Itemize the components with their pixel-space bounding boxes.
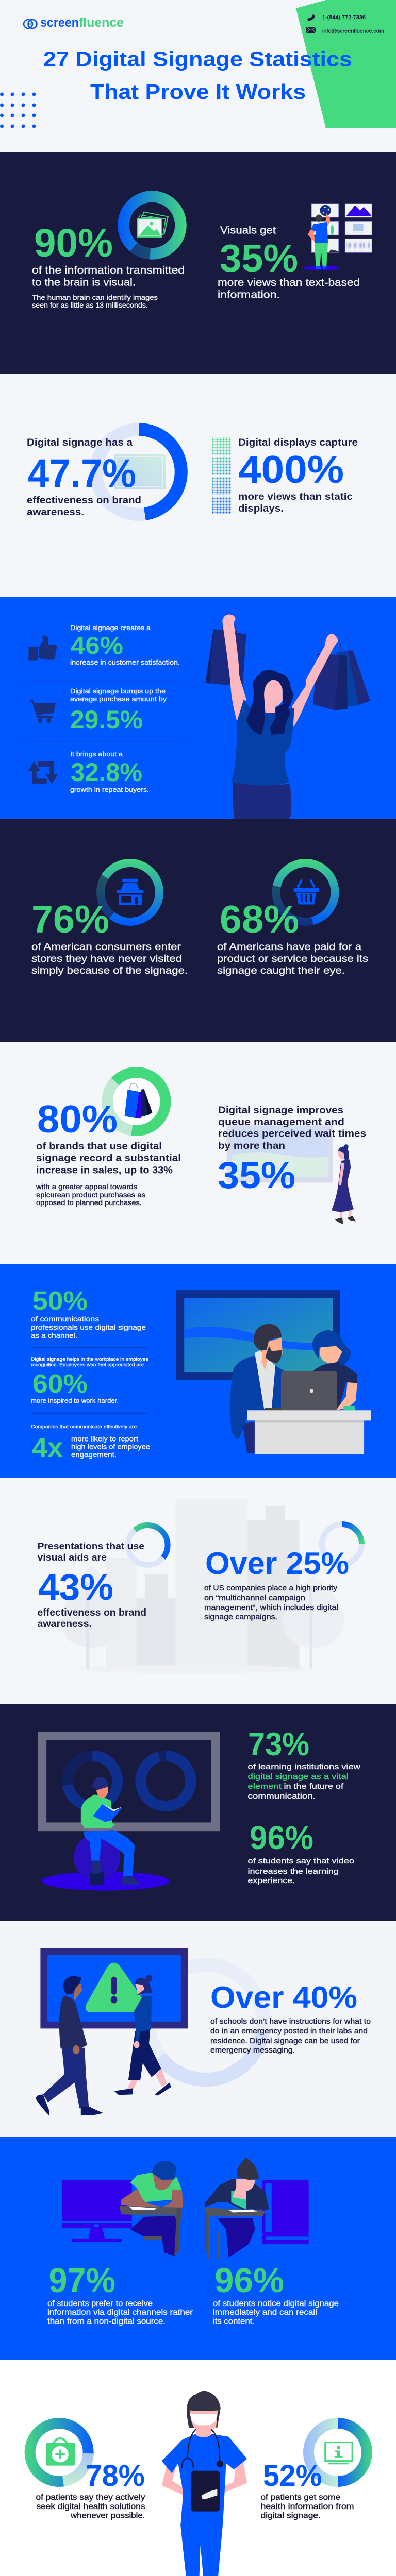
stat: 52%: of patients get some	[261, 2493, 340, 2502]
stat: 96% recall: 96%	[214, 2261, 284, 2300]
stat: over 40%: residence. Digital signage can be used for	[210, 2037, 360, 2045]
stat: 43%: 43%	[38, 1567, 113, 1608]
title: That Prove It Works	[90, 80, 306, 104]
stat: 97%: information via digital channels rather	[47, 2308, 193, 2317]
stat: 60%: more inspired to work harder.	[31, 1397, 119, 1404]
stat: 97%: 97%	[48, 2261, 116, 2300]
icon: info screen	[325, 2443, 352, 2464]
stat: 4x: high levels of employee	[71, 1443, 150, 1451]
stat: 50%: 50%	[32, 1286, 88, 1315]
stat: 73%: of learning institutions view	[248, 1762, 360, 1771]
logo: screen	[40, 15, 79, 30]
donut chart: left	[68, 1756, 118, 1806]
stat: queue 35%	[218, 1105, 366, 1196]
stat: 4x: more likely to report	[71, 1435, 138, 1443]
stat: 4x	[31, 1424, 150, 1463]
stat: over 40%: do in an emergency posted in their labs and	[210, 2027, 368, 2036]
title: 27 Digital Signage Statistics	[43, 47, 352, 71]
stat: 80%: increase in sales, up to 33%	[36, 1165, 173, 1176]
icon: phone	[307, 14, 315, 21]
panel: presentations and campaigns	[0, 1478, 396, 1704]
stat: queue 35%: queue management and	[218, 1117, 344, 1128]
donut chart: 40%	[148, 1965, 263, 2079]
stat: 60%: 60%	[32, 1369, 88, 1398]
stat: 43%: visual aids are	[37, 1552, 107, 1563]
illustration: students at desks	[62, 2158, 309, 2259]
illustration: person viewing screens	[303, 204, 372, 270]
stat: 60%	[31, 1357, 148, 1404]
stat: 400%: Digital displays capture	[238, 437, 358, 448]
email: info@screenfluence.com	[322, 28, 384, 34]
donut chart: 52%	[308, 2424, 367, 2481]
stat: 68%: 68%	[220, 897, 299, 941]
stat: 96% recall	[213, 2261, 339, 2326]
stat: over 40%: Over 40%	[210, 1980, 357, 2014]
icon: mail	[306, 27, 316, 33]
stat: 29.5%: Digital signage bumps up the	[70, 687, 166, 695]
panel: shopping	[0, 597, 396, 819]
stat: 52%: health information from	[261, 2502, 354, 2511]
stat: 32.8%: It brings about a	[70, 750, 123, 758]
stat: 35%: 35%	[220, 236, 298, 280]
icon: cart	[30, 700, 56, 723]
stat: 52%: 52%	[263, 2459, 322, 2493]
stat: 80%: of brands that use digital	[36, 1141, 162, 1152]
icon: photos	[138, 212, 168, 237]
stat: 80%	[36, 1097, 181, 1207]
icon: medical bag	[46, 2438, 75, 2466]
panel: emergency	[0, 1921, 396, 2137]
stat: 90%: seen for as little as 13 milliseconds.	[32, 301, 148, 309]
illustration: standing woman	[332, 1144, 356, 1224]
stat: 80%: 80%	[37, 1097, 118, 1141]
donut chart: 76%	[101, 863, 159, 922]
illustration: city backdrop	[62, 1499, 344, 1673]
stat: 76%	[31, 897, 188, 976]
stat: 97%: of students prefer to receive	[47, 2299, 153, 2308]
stat: 73%: element	[248, 1782, 282, 1791]
stat: 90%	[32, 221, 185, 309]
stat: 46%: 46%	[71, 632, 123, 659]
panel: visuals	[0, 152, 396, 374]
stat: 50%: professionals use digital signage	[31, 1323, 146, 1331]
stat: 73%: 73%	[248, 1726, 309, 1762]
stat: 46%	[70, 624, 180, 666]
stat: 76%: simply because of the signage.	[31, 965, 188, 976]
panel: workplace	[0, 1264, 396, 1478]
stat: 96% recall: of students notice digital signage	[213, 2299, 339, 2308]
stat: 4x: Companies that communicate effectively are	[31, 1424, 137, 1430]
stat: 47.7%: 47.7%	[28, 450, 136, 496]
panel: brand awareness and views	[27, 423, 358, 521]
stat: 97%: than from a non-digital source.	[47, 2317, 166, 2326]
donut chart: 78%	[30, 2424, 88, 2481]
stat: 68%: product or service because its	[217, 954, 368, 964]
stat: 400%	[238, 437, 358, 514]
donut chart: 68%	[276, 863, 335, 922]
illustration: woman with shopping bags	[205, 614, 370, 819]
stat: 68%	[217, 897, 368, 976]
stat: 400%: more views than static	[238, 492, 353, 502]
donut chart: right	[141, 1756, 191, 1806]
stat: 43%	[37, 1540, 146, 1630]
stat: 90%: of the information transmitted	[32, 265, 185, 276]
stat: 35%: information.	[218, 290, 280, 301]
stat: 400%: displays.	[238, 503, 284, 514]
icon: thumbs up	[28, 635, 57, 661]
illustration: frame	[38, 1732, 220, 1831]
illustration: nurse	[162, 2391, 247, 2576]
donut chart: 47.7%	[96, 430, 182, 514]
stat: 96% video: increases the learning	[248, 1867, 339, 1876]
stat: over 25%: Over 25%	[205, 1546, 349, 1581]
stat: 32.8%: growth in repeat buyers.	[70, 786, 149, 793]
stat: 47.7%	[27, 437, 141, 518]
stat: 60%: recognition. Employees who feel appreciated are	[31, 1362, 144, 1368]
phone number: 1-(844) 772-7336	[322, 14, 366, 21]
donut chart: 25%	[322, 1524, 362, 1564]
stat: 96% recall: immediately and can recall	[213, 2308, 317, 2317]
stat: 47.7%: effectiveness on brand	[27, 495, 141, 506]
illustration: two colleagues at a laptop	[176, 1290, 371, 1454]
stat: 68%: signage caught their eye.	[217, 965, 345, 976]
stat: 50%: as a channel.	[31, 1331, 77, 1340]
panel: students	[0, 2137, 396, 2360]
stat: 90%: to the brain is visual.	[32, 277, 136, 289]
stat: 400%: 400%	[238, 448, 344, 491]
stat: 35%: Visuals get	[220, 225, 276, 236]
stat: 73%	[248, 1726, 360, 1801]
stat: over 25%: of US companies place a high priority	[204, 1584, 338, 1592]
stat: 78%: whenever possible.	[70, 2511, 145, 2520]
stat: over 25%	[204, 1546, 349, 1621]
stat: 4x: 4x	[32, 1432, 63, 1463]
stat: 29.5%: 29.5%	[70, 705, 143, 734]
stat: 52%	[261, 2459, 354, 2520]
panel: consumers	[0, 819, 396, 1042]
stat: 80%: with a greater appeal towards	[36, 1183, 137, 1191]
stat: 50%: of communications	[31, 1315, 99, 1323]
stat: 47.7%: Digital signage has a	[27, 437, 133, 448]
stat: 80%: signage record a substantial	[36, 1153, 181, 1164]
stat: queue 35%: 35%	[218, 1155, 295, 1196]
stat: 96% video	[248, 1819, 354, 1885]
stat: 97%	[47, 2261, 193, 2326]
stat: 29.5%: average purchase amount by	[70, 695, 167, 703]
stat: 43%: effectiveness on brand	[37, 1607, 146, 1618]
stat: 29.5%	[70, 687, 167, 734]
stat: 76%: of American consumers enter	[31, 942, 182, 953]
stat: 96% video: 96%	[250, 1819, 314, 1856]
stat: over 25%: on “multichannel campaign	[204, 1594, 305, 1602]
stat: 80%: opposed to planned purchases.	[36, 1199, 142, 1207]
stat: 73%: communication.	[248, 1792, 316, 1801]
stat: 90%: 90%	[34, 221, 113, 265]
stat: 68%: of Americans have paid for a	[217, 942, 361, 953]
stat: 76%: stores they have never visited	[31, 954, 182, 964]
illustration: student reading	[41, 1777, 169, 1891]
stat: 78%: seek digital health solutions	[36, 2502, 145, 2511]
stat: 90%: The human brain can identify images	[32, 293, 158, 301]
icon: store	[117, 879, 143, 905]
donut chart: 80%	[107, 1073, 166, 1130]
green corner shape	[296, 0, 396, 128]
stat: 46%: Digital signage creates a	[70, 624, 151, 632]
stat: over 40%: emergency messaging.	[210, 2046, 295, 2055]
panel: brands and queues	[0, 1042, 396, 1264]
icon: basket	[293, 879, 319, 905]
stat: 35%: more views than text-based	[218, 277, 360, 289]
dot grid	[0, 93, 36, 128]
stat: 32.8%: 32.8%	[71, 758, 142, 787]
stat: 4x: engagement.	[71, 1451, 117, 1459]
stat: 43%: Presentations that use	[37, 1540, 144, 1551]
stat: 96% video: experience.	[248, 1876, 295, 1885]
stat: queue 35%: reduces perceived wait times	[218, 1128, 366, 1140]
stat: over 40%	[210, 1980, 371, 2055]
stat: over 40%: of schools don’t have instructions for what to	[210, 2018, 371, 2026]
stat: 78%	[36, 2459, 145, 2520]
donut chart: 43%	[128, 1525, 168, 1565]
logo: fluence	[79, 15, 124, 30]
stat: 32.8%	[70, 750, 149, 793]
icon: screen	[114, 454, 166, 489]
donut chart: 90%	[124, 197, 180, 253]
icon: repeat arrows	[28, 761, 58, 784]
stat: 46%: increase in customer satisfaction.	[70, 658, 180, 666]
icon: shopping bags	[125, 1083, 152, 1118]
panel: learning	[0, 1704, 396, 1921]
stat: 60%: Digital signage helps in the workplace in employee	[31, 1357, 148, 1362]
stat: 73%: digital signage as a vital	[248, 1772, 349, 1781]
stat: over 25%: signage campaigns.	[204, 1613, 277, 1621]
dot blocks	[212, 437, 231, 514]
stat: 96% video: of students say that video	[248, 1857, 354, 1866]
stat: queue 35%: Digital signage improves	[218, 1105, 343, 1116]
stat: 76%: 76%	[31, 897, 109, 941]
title	[43, 47, 352, 104]
stat: 47.7%: awareness.	[27, 507, 84, 518]
stat: 78%: of patients say they actively	[36, 2493, 145, 2502]
panel: patients	[0, 2360, 396, 2576]
stat: 80%: epicurean product purchases as	[36, 1191, 145, 1199]
stat: 35%	[218, 225, 360, 301]
stat: queue 35%: by more than	[218, 1141, 285, 1151]
stat: 50%	[31, 1286, 146, 1340]
stat: 73%: in the future of	[284, 1782, 344, 1791]
illustration: screen backdrop	[227, 1125, 333, 1182]
logo	[24, 15, 124, 30]
stat: over 25%: management”, which includes digital	[204, 1604, 338, 1612]
panel: header	[0, 0, 396, 152]
stat: 78%: 78%	[86, 2459, 145, 2493]
illustration: warning screen and two people	[36, 1948, 188, 2115]
stat: 96% recall: its content.	[213, 2317, 255, 2326]
stat: 43%: awareness.	[37, 1619, 92, 1630]
stat: 52%: digital signage.	[261, 2511, 321, 2520]
